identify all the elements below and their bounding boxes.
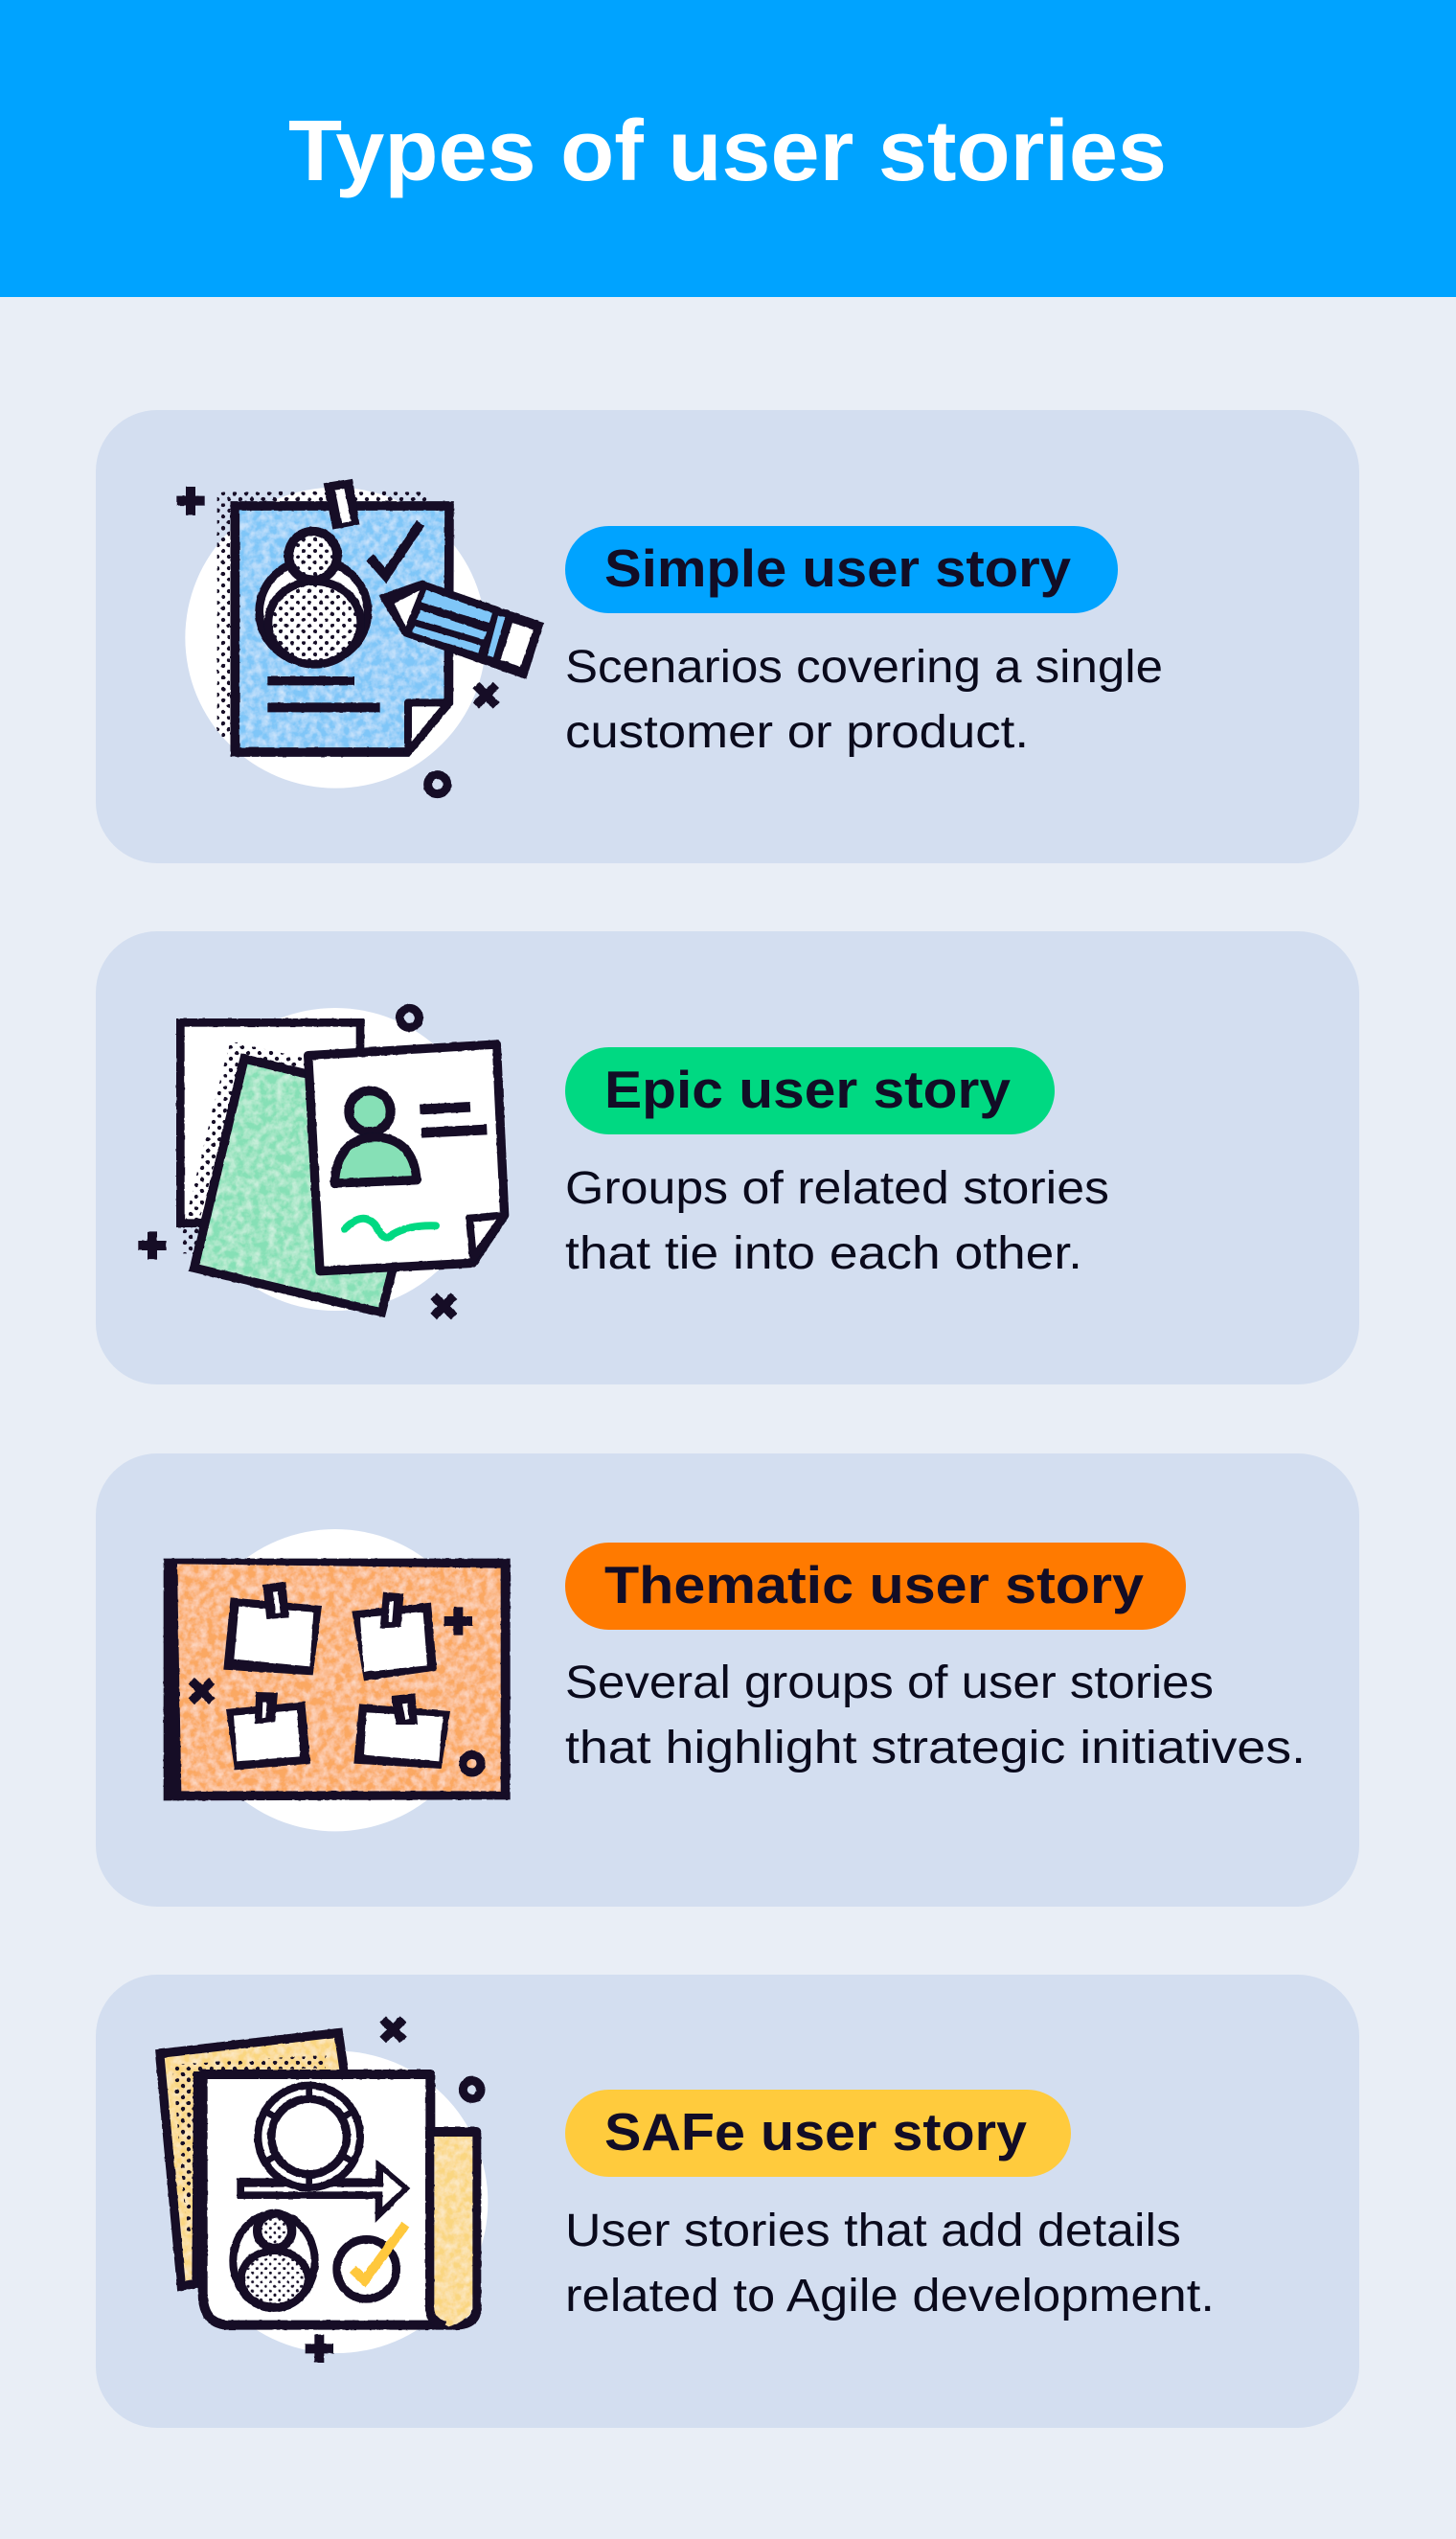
badge: thematic user story: Thematic user story bbox=[604, 1555, 1144, 1614]
description: thematic user story bbox=[565, 1658, 1306, 1773]
panel: SAFe user story bbox=[96, 1975, 1359, 2428]
header banner bbox=[0, 0, 1456, 297]
icon: profile document with pencil bbox=[176, 478, 544, 794]
description: simple user story bbox=[565, 642, 1163, 758]
card background bbox=[96, 410, 1359, 863]
panel: epic user story bbox=[96, 931, 1359, 1384]
badge: SAFe user story bbox=[565, 2090, 1071, 2177]
badge: epic user story: Epic user story bbox=[604, 1060, 1011, 1119]
description: thematic user story: Several groups of user stories bbox=[565, 1658, 1214, 1708]
card background bbox=[96, 1975, 1359, 2428]
icon: pin board with notes bbox=[164, 1529, 511, 1831]
description: SAFe user story bbox=[565, 2206, 1215, 2322]
description: epic user story bbox=[565, 1163, 1109, 1279]
badge: thematic user story bbox=[565, 1543, 1186, 1630]
description: epic user story: Groups of related stories bbox=[565, 1163, 1109, 1214]
icon: stacked profile sheets bbox=[138, 1008, 505, 1316]
panel: simple user story bbox=[96, 410, 1359, 863]
panel: thematic user story bbox=[96, 1453, 1359, 1907]
description: SAFe user story: User stories that add details bbox=[565, 2206, 1181, 2256]
badge: simple user story: Simple user story bbox=[604, 538, 1071, 598]
description: epic user story: that tie into each other. bbox=[565, 1228, 1082, 1279]
card background bbox=[96, 931, 1359, 1384]
description: thematic user story: that highlight strategic initiatives. bbox=[565, 1723, 1306, 1773]
description: simple user story: customer or product. bbox=[565, 707, 1029, 758]
icon: agile plan document bbox=[160, 2020, 488, 2363]
badge: epic user story bbox=[565, 1047, 1055, 1134]
card background bbox=[96, 1453, 1359, 1907]
badge: SAFe user story: SAFe user story bbox=[604, 2102, 1027, 2162]
title: Types of user stories bbox=[288, 103, 1167, 199]
description: simple user story: Scenarios covering a single bbox=[565, 642, 1163, 693]
badge: simple user story bbox=[565, 526, 1118, 613]
description: SAFe user story: related to Agile development. bbox=[565, 2271, 1215, 2322]
